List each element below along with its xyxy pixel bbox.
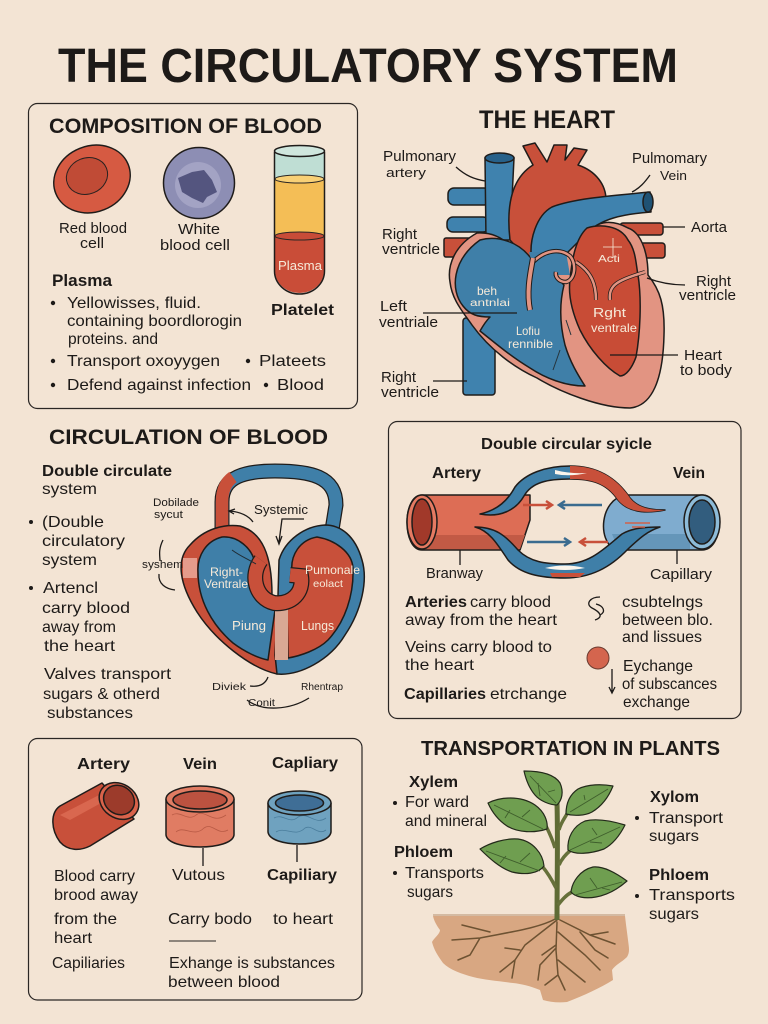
plant text: right: sugars [649, 828, 699, 845]
label: white blood cell [160, 221, 230, 254]
red right chamber [569, 226, 640, 376]
heart callout labels: ventricle [381, 385, 439, 401]
looping vessel hook [232, 550, 301, 603]
plasma text block: Yellowisses, fluid. [67, 295, 201, 312]
vessel description text: Capiliary [267, 867, 337, 884]
icon: blood test tube: Plasma [278, 258, 323, 273]
pulmonary artery [485, 153, 514, 240]
panel: double circular cycle [388, 422, 741, 718]
plant text: right: Transports [649, 887, 735, 904]
plasma text block: Transport oxoyygen [67, 353, 220, 370]
text block: double circulate system: Valves transport [44, 666, 172, 683]
vessel pointer lines [203, 845, 297, 866]
icon: red blood cell [43, 134, 141, 224]
text block: double circulate system: system [42, 481, 97, 498]
text block: double circulate system: the heart [44, 638, 116, 655]
plant text: left [393, 774, 487, 901]
roots [452, 918, 615, 990]
label: white blood cell: blood cell [160, 237, 230, 254]
vessel description text [52, 867, 337, 991]
icon: blood cell with arrow [587, 647, 615, 693]
diagram labels [204, 563, 360, 633]
chamber labels: Lofiu [516, 324, 540, 338]
plant text: left: Phloem [394, 844, 453, 861]
text block: double circulate system: Artencl [43, 580, 98, 597]
vessel stubs, back layer [444, 188, 665, 395]
text block: arteries and veins: away from the heart [405, 612, 558, 629]
platelet text block: Plateets [259, 353, 326, 370]
callout labels [142, 497, 343, 709]
text block: arteries and veins: Veins carry blood to [405, 639, 552, 656]
systemic loop [222, 471, 336, 530]
diagram labels: Piung [232, 618, 266, 633]
icon: blood test tube [274, 146, 324, 294]
heart callout labels: Right [696, 274, 731, 290]
chamber labels [470, 238, 637, 351]
plant text: left: For ward [405, 794, 469, 811]
text block: double circulate system: circulatory [42, 533, 125, 550]
heart outer red wall [181, 526, 290, 674]
icon: capillary segment [268, 791, 331, 844]
text block: exchange: of subscances [622, 676, 717, 693]
chamber labels: ventrale [591, 321, 637, 335]
heart callout labels: Pulmonary [383, 149, 457, 165]
callout labels: Diviek [212, 682, 247, 693]
text block: substances: csubtelngs [622, 594, 703, 611]
heart valves [528, 251, 645, 370]
pulmonary vein [531, 192, 651, 262]
leaf veins [486, 776, 622, 895]
text block: exchange [622, 658, 717, 711]
diagram: artery and vein capillary bed [407, 466, 720, 578]
vessel labels: Branway [426, 565, 483, 582]
capillary loops [480, 466, 665, 515]
plant text: right: Phloem [649, 867, 709, 884]
vessel description text: heart [54, 930, 93, 947]
text block: substances: and lissues [622, 629, 702, 646]
red chamber [287, 537, 353, 658]
heart callout labels: artery [386, 166, 427, 180]
text block: arteries and veins: carry blood [470, 594, 551, 611]
vessel labels [426, 465, 713, 583]
diagram: heart anatomy [444, 143, 665, 408]
platelet text block: Blood [277, 377, 324, 394]
vessel labels: Artery [432, 465, 481, 482]
plasma text block: Plasma [52, 272, 113, 290]
plant text: left: Xylem [409, 774, 458, 791]
vessel description text: to heart [273, 911, 334, 928]
plant text: right [635, 789, 735, 923]
vessel description text: Vutous [172, 867, 225, 884]
text block: double circulate system: (Double [42, 514, 104, 531]
heart outer blue wall [275, 525, 364, 674]
label: red blood cell: cell [80, 235, 104, 252]
text block: substances: between blo. [622, 612, 713, 629]
diagram labels: Ventrale [204, 577, 248, 591]
leaves [480, 771, 627, 898]
plant text: left: Transports [405, 865, 484, 882]
text block: double circulate system: sugars & otherd [43, 686, 160, 703]
artery cylinder [407, 495, 530, 550]
label: white blood cell: White [178, 221, 220, 238]
text block: arteries and veins: etrchange [490, 686, 567, 703]
blue chamber [198, 537, 275, 660]
blue left chamber [455, 238, 585, 386]
vessel description text: Capiliaries [52, 955, 125, 972]
vessel description text: between blood [168, 974, 280, 991]
text block: arteries and veins [404, 594, 567, 703]
panel: composition of blood [28, 104, 358, 408]
heart callout labels: ventriale [379, 315, 438, 331]
heart callout labels: Left [380, 299, 407, 315]
vessel headings [77, 755, 338, 773]
callout labels: Dobilade [153, 497, 199, 509]
icon: artery [53, 775, 146, 849]
plant text: right: sugars [649, 906, 699, 923]
text block: double circulate system [29, 463, 172, 722]
vessel description text: Exhange is substances [169, 955, 335, 972]
heart callout labels: Vein [660, 168, 687, 183]
diagram labels: Right- [210, 565, 243, 579]
aorta arch [509, 143, 606, 262]
text block: double circulate system: carry blood [42, 600, 130, 617]
vessel description text: brood away [54, 887, 138, 904]
vessel headings: Artery [77, 756, 130, 773]
heading: transportation in plants: TRANSPORTATION IN PLANTS [421, 738, 720, 760]
text block: double circulate system: system [42, 552, 97, 569]
diagram: double circulation heart [142, 471, 364, 709]
chamber labels: Rght [593, 305, 626, 320]
icon: spiral [589, 597, 603, 620]
callout labels: syshem [142, 559, 183, 571]
stem and branches [554, 803, 560, 920]
heading: composition of blood: COMPOSITION OF BLOOD [49, 114, 322, 138]
heart callout labels: Heart [684, 348, 722, 364]
heart callout labels: Right [381, 370, 416, 386]
text block: double circulate system: away from [42, 619, 116, 636]
platelet text block: Platelet [271, 302, 335, 319]
heart callout labels: ventricle [679, 288, 736, 304]
vessel description text: Blood carry [54, 868, 135, 885]
plant text: left: and mineral [405, 813, 487, 830]
vein cylinder [604, 495, 720, 550]
callout labels: Rhentrap [301, 682, 343, 693]
heart callout labels: ventricle [382, 242, 440, 258]
vessel description text: Carry bodo [168, 911, 252, 928]
heading: double circular syicle: Double circular syicle [481, 436, 652, 453]
heart callout labels [379, 149, 736, 401]
icon: vein segment [166, 786, 234, 847]
text block: arteries and veins: Capillaries [404, 686, 486, 703]
soil [432, 916, 629, 1002]
diagram labels: Lungs [301, 618, 334, 633]
heart callout labels: Right [382, 227, 417, 243]
chamber labels: antnlai [470, 298, 510, 309]
icon: white blood cell [164, 148, 234, 218]
vessel headings: Capliary [272, 755, 338, 772]
vessel headings: Vein [183, 756, 217, 773]
label: red blood cell: Red blood [59, 220, 127, 237]
text block: substances [622, 594, 713, 646]
heading: the heart: THE HEART [479, 106, 615, 134]
flow arrows [523, 501, 608, 546]
panel: blood vessels [28, 738, 362, 1000]
vessel description text: from the [54, 911, 117, 928]
vessel labels: Capillary [650, 566, 713, 583]
text block: double circulate system: Double circulate [42, 463, 172, 480]
plant text: left: sugars [407, 884, 453, 901]
heart callout labels: Pulmomary [632, 151, 708, 167]
septum [275, 607, 288, 660]
text block: arteries and veins: the heart [405, 657, 475, 674]
platelet text block [246, 302, 335, 394]
label: red blood cell [59, 220, 127, 252]
plant text: right: Xylom [650, 789, 699, 806]
heading: circulation of blood: CIRCULATION OF BLOOD [49, 425, 328, 449]
illustration: plant with roots [432, 771, 629, 1002]
text block: exchange: exchange [623, 694, 690, 711]
plant text: right: Transport [649, 810, 724, 827]
plasma text block: proteins. and [68, 331, 158, 348]
chamber labels: beh [477, 284, 497, 298]
title: THE CIRCULATORY SYSTEM [58, 40, 678, 93]
callout labels: sycut [154, 509, 183, 521]
heart callout labels: to body [680, 363, 733, 379]
callout labels: Systemic [254, 503, 308, 517]
chamber labels: Acti [598, 253, 620, 265]
plasma text block: containing boordlorogin [67, 313, 242, 330]
diagram labels: Pumonale [305, 563, 360, 577]
plasma text block [51, 272, 251, 394]
diagram labels: eolact [313, 578, 343, 590]
heart callout labels: Aorta [691, 220, 728, 236]
heart muscle wall [449, 222, 664, 408]
text block: double circulate system: substances [47, 705, 133, 722]
callout labels: Conit [248, 698, 275, 709]
plasma text block: Defend against infection [67, 377, 251, 394]
text block: exchange: Eychange [623, 658, 693, 675]
vessel labels: Vein [673, 465, 705, 482]
text block: arteries and veins: Arteries [405, 594, 467, 611]
chamber labels: rennible [508, 337, 553, 351]
